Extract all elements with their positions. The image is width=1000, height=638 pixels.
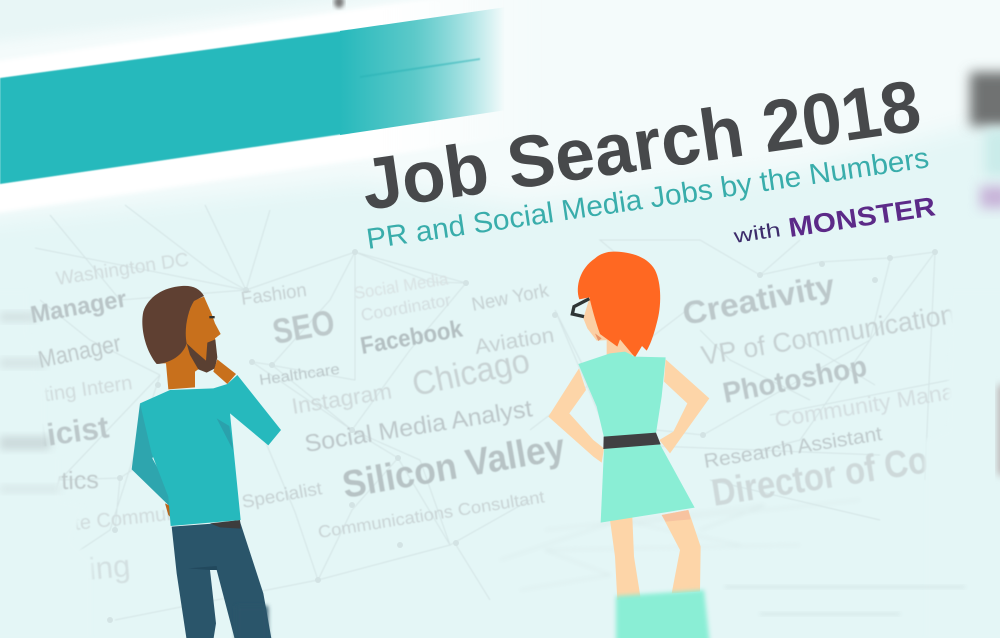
word: Research Assistant: Research Assistant — [702, 423, 884, 473]
woman belt — [603, 433, 661, 449]
word: VP of Communications: VP of Communications — [699, 297, 970, 371]
woman glasses — [572, 299, 589, 317]
woman knee shadow — [662, 510, 691, 522]
subtitle: PR and Social Media Jobs by the Numbers — [364, 142, 931, 256]
word: Communications Consultant: Communications Consultant — [317, 487, 546, 542]
woman left arm — [548, 368, 604, 463]
title: Job Search 2018 — [357, 65, 926, 226]
word: Social Media: Social Media — [353, 269, 450, 303]
woman lips — [595, 333, 602, 341]
word: Community Manager: Community Manager — [773, 374, 989, 432]
blurred lower text — [725, 585, 965, 616]
Monster logo wordmark: MONSTER — [786, 191, 937, 243]
network nodes — [107, 249, 938, 623]
word: Specialist: Specialist — [240, 478, 323, 512]
man figure — [132, 286, 281, 638]
man trouser blurred hem — [236, 606, 268, 638]
network of connecting lines — [35, 205, 950, 620]
header white wash — [0, 0, 1000, 222]
woman right arm — [659, 359, 709, 453]
word: Chicago: Chicago — [409, 342, 533, 404]
word: Healthcare: Healthcare — [258, 361, 341, 389]
woman hair — [578, 252, 660, 357]
word: Social Media Analyst: Social Media Analyst — [303, 395, 534, 458]
woman skirt — [601, 444, 695, 523]
word: Silicon Valley: Silicon Valley — [339, 426, 568, 507]
word: New York: New York — [470, 280, 551, 316]
word: Creativity: Creativity — [679, 267, 838, 332]
woman shoes blurred block — [616, 590, 710, 638]
word: Facebook: Facebook — [358, 315, 465, 360]
woman dress top — [578, 352, 666, 437]
left edge blur fade — [0, 290, 92, 638]
word: Manager: Manager — [36, 330, 123, 374]
woman neck — [607, 337, 633, 355]
word: Corporate Communications: te Commun — [73, 502, 178, 535]
man trousers — [172, 522, 272, 638]
woman face — [583, 298, 610, 341]
word: SEO: SEO — [270, 303, 337, 352]
man rear hand — [165, 503, 172, 518]
word: Coordinator: Coordinator — [359, 290, 453, 325]
man trousers shadow — [188, 566, 217, 570]
faint lower network lines — [500, 500, 860, 590]
man neck and face — [157, 297, 221, 389]
man hair — [142, 286, 204, 364]
man eye — [209, 316, 215, 318]
word: Fashion: Fashion — [240, 280, 308, 310]
right edge blur fade — [925, 72, 1000, 638]
sponsor line — [731, 191, 937, 248]
word: Instagram: Instagram — [290, 378, 394, 419]
word cloud — [0, 249, 1000, 595]
man beard — [187, 339, 217, 373]
word: Manager bold: Manager — [28, 285, 129, 329]
word: Aviation: Aviation — [473, 324, 556, 359]
woman figure — [548, 252, 709, 600]
word: Washington DC: Washington DC — [55, 249, 190, 290]
teal header band — [0, 5, 520, 184]
word: Photoshop: Photoshop — [720, 351, 870, 410]
man sweater — [140, 375, 281, 526]
word: Analytics: Analytics — [0, 466, 99, 497]
blob at top edge — [334, 0, 344, 8]
with: with — [731, 219, 782, 248]
woman legs — [610, 510, 701, 600]
man belt — [210, 520, 241, 529]
man hand — [213, 359, 236, 384]
man rear arm — [132, 403, 170, 507]
man arm shadow — [217, 418, 233, 451]
